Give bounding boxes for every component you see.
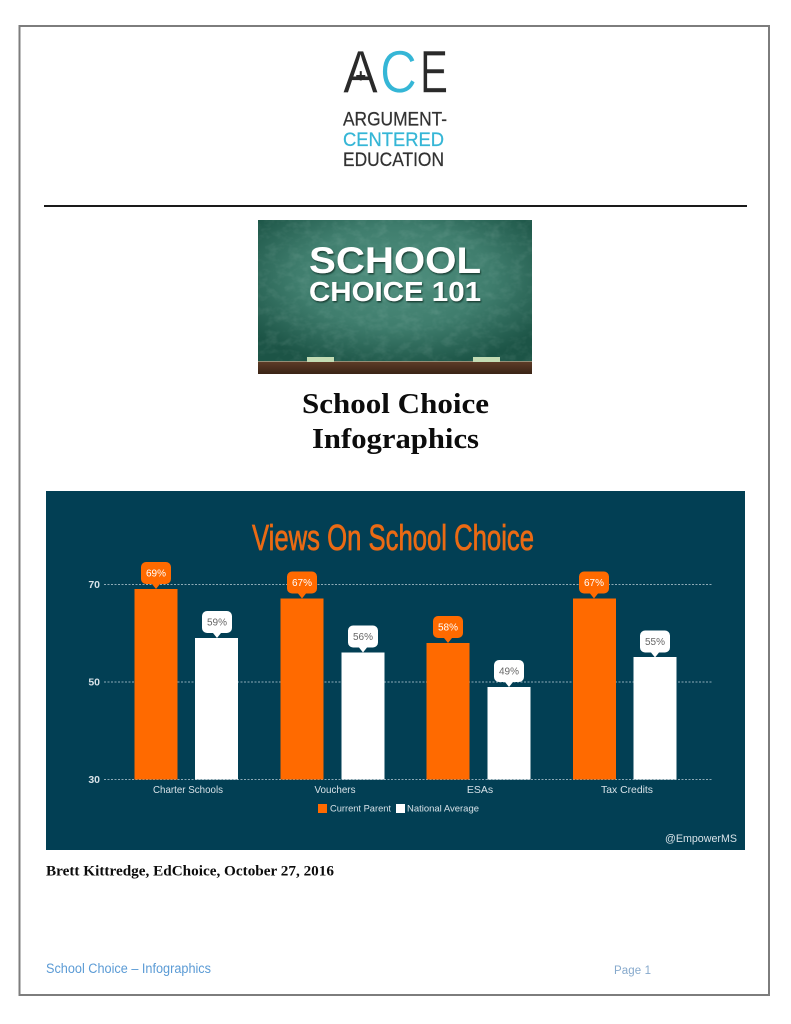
logo plus sign: +: [356, 66, 366, 86]
logo letter A: A: [343, 38, 378, 106]
footer title: School Choice – Infographics: [46, 961, 211, 976]
callout 58%: 58%: [438, 622, 458, 634]
chalkboard heading: [309, 240, 481, 307]
y axis labels: 50: [88, 676, 100, 688]
chalk piece left: [307, 357, 334, 362]
footer page number: Page 1: [614, 965, 651, 977]
x axis labels: ESAs: [467, 784, 493, 796]
divider rule: [44, 205, 747, 207]
logo letter E: E: [420, 38, 448, 106]
chalkboard surface: [258, 220, 532, 362]
callout 58%: [433, 616, 463, 643]
chalk ledge: [258, 361, 532, 374]
logo: ACE Argument-Centered Education: [343, 38, 448, 171]
callout 67%: [579, 572, 609, 598]
group: ESAs: [426, 616, 530, 780]
chart background: [46, 491, 745, 850]
legend: [318, 804, 479, 814]
logo line: Centered: CENTERED: [343, 129, 444, 151]
y axis labels: [88, 579, 100, 786]
group: Vouchers: [280, 572, 384, 780]
x axis labels: Vouchers: [314, 784, 356, 796]
group: Tax Credits: [573, 572, 676, 780]
callout 67%: 67%: [292, 578, 312, 589]
x axis labels: [153, 784, 653, 796]
title line 1: School Choice: [302, 389, 489, 420]
y axis labels: 70: [88, 579, 100, 591]
chart title: Views On School Choice: [252, 517, 534, 558]
source caption: Brett Kittredge, EdChoice, October 27, 2016: [46, 864, 334, 880]
chart credit: @EmpowerMS: [665, 833, 737, 845]
chalkboard image: [258, 220, 532, 374]
callout 69%: 69%: [146, 568, 166, 580]
group: Charter Schools: [134, 562, 238, 780]
logo letter C: C: [380, 38, 417, 106]
callout 69%: [141, 562, 171, 589]
title line 2: Infographics: [312, 424, 479, 455]
y axis labels: 30: [88, 774, 100, 786]
callout 67%: [287, 572, 317, 598]
chalk piece right: [473, 357, 500, 362]
callout 59%: [202, 611, 232, 638]
legend: Current Parent: [330, 804, 391, 814]
logo line: Argument-: ARGUMENT-: [343, 108, 447, 130]
callout 49%: [494, 660, 524, 687]
document title: [302, 389, 489, 455]
callout 55%: 55%: [645, 637, 665, 648]
chalkboard text: School: SCHOOL: [309, 240, 481, 281]
panel: bar chart: [46, 491, 745, 850]
callout 49%: 49%: [499, 666, 519, 678]
callout 59%: 59%: [207, 618, 227, 628]
logo line: Education: EDUCATION: [343, 149, 444, 171]
callout 56%: 56%: [353, 632, 373, 643]
legend: National Average: [407, 804, 479, 814]
callout 56%: [348, 626, 378, 652]
x axis labels: Tax Credits: [601, 784, 653, 796]
x axis labels: Charter Schools: [153, 784, 223, 796]
callout 67%: 67%: [584, 578, 604, 589]
callout 55%: [640, 630, 670, 658]
chalkboard text: Choice 101: CHOICE 101: [309, 276, 481, 307]
